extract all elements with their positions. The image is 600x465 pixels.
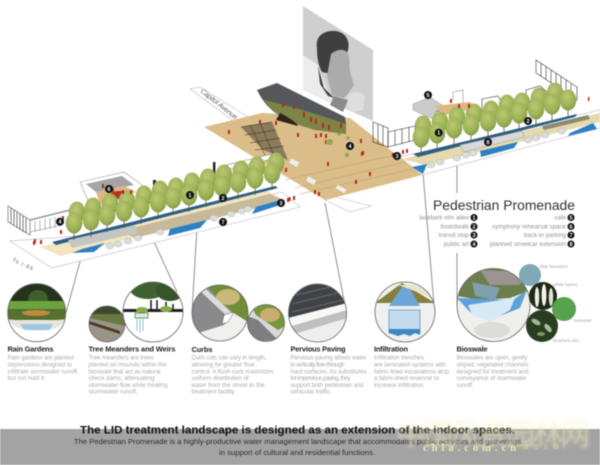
back shelter left (153, 153, 276, 188)
plant: horsetail: horsetail (574, 318, 591, 323)
text: Tree Meanders and Weirs: check dams, attenuating (88, 375, 154, 382)
number badges on plan: 7 (222, 220, 224, 226)
label: Capitol Avenue: Capitol Avenue (199, 88, 239, 121)
text: Infiltration: a fabric-lined reservoir to (374, 375, 440, 382)
text: Curbs (190, 345, 274, 396)
legend: 2 (472, 224, 476, 230)
summary text: The Pedestrian Promenade is a highly-productive water management landscape that accommodates public activities and gatherings (74, 437, 521, 446)
watermark: chla.com.cn (423, 443, 516, 454)
text: Pervious Paving (290, 344, 366, 396)
illustration: tree meander section (123, 279, 184, 342)
text: Pervious Paving: for impervious paving, they (290, 375, 351, 382)
number badges on plan: 1 (437, 131, 440, 137)
text: Rain Gardens: depressions designed to (8, 362, 73, 368)
text: Curbs: treatment facility. (192, 388, 236, 396)
text: Pervious Paving: support both pedestrian and (290, 382, 364, 389)
label: Capitol Avenue (190, 87, 248, 122)
text: Tree Meanders and Weirs: planted on mounds within the (88, 362, 167, 368)
cafe (413, 90, 476, 120)
legend: 4 (472, 242, 476, 248)
legend (419, 214, 574, 248)
streetcar (460, 131, 524, 152)
text: Bioswale: Bioswales are open, gently (456, 354, 528, 362)
text: Curbs: allowing for greater flow (192, 362, 255, 368)
number badges on plan: 1 (188, 193, 192, 199)
text: Tree Meanders and Weirs: stormwater flow while treating (88, 382, 168, 389)
text: Bioswale: runoff. (456, 382, 474, 389)
legend: boardwalk (441, 224, 470, 230)
plant: white lupine: white lupine (553, 282, 578, 287)
number badges on plan: 2 (222, 196, 224, 202)
illustration: bioswale (457, 268, 531, 342)
text: Infiltration: Infiltration trenches (374, 354, 424, 362)
text: Rain Gardens (8, 344, 79, 382)
text: Curbs: Curb cuts can vary in length, (192, 354, 267, 362)
watermark: 中国风景园林网 (396, 419, 590, 452)
text: Pervious Paving: hard surfaces. As substitutes (290, 368, 366, 375)
text: Curbs: Curbs (192, 345, 212, 354)
text: Tree Meanders and Weirs: Tree Meanders and Weirs (88, 344, 176, 354)
text: Infiltration: increase infiltration. (374, 382, 425, 389)
legend: 3 (472, 233, 476, 239)
legend: lacebark elm allee (419, 214, 470, 222)
parked cars right (427, 128, 566, 168)
illustration: tree meander photo (89, 306, 125, 342)
number badges on plan: 3 (396, 154, 398, 160)
text: Tree Meanders and Weirs: Tree meanders are trees (88, 354, 154, 362)
plant: horsetail (552, 297, 591, 323)
number badges on plan (56, 91, 532, 226)
plant: lacebark elm (526, 310, 579, 343)
text: Bioswale: sloped, vegetated channels (456, 362, 528, 368)
text: Infiltration: fabric-lined excavations atop (374, 368, 450, 375)
text: Tree Meanders and Weirs: bioswale that act as natural (88, 368, 160, 375)
rehearsal pavilion (80, 172, 142, 205)
legend: 7 (570, 233, 572, 239)
number badges on plan: 8 (486, 140, 490, 146)
text: Pervious Paving: to vertically flow through (290, 362, 344, 368)
plaza (204, 113, 422, 212)
legend: back-in parking (524, 232, 567, 239)
illustration: rain garden (7, 283, 67, 343)
legend: 8 (570, 242, 572, 248)
text: Infiltration (374, 344, 450, 389)
plant: lacebark elm: lacebark elm (553, 338, 579, 343)
text: Pervious Paving: vehicular traffic. (290, 388, 332, 396)
number badges on plan: 5 (426, 93, 430, 99)
left promenade ground (10, 186, 300, 268)
watermark: 中国风景园林网 (396, 419, 590, 452)
text: Curbs: uniform distribution of (192, 375, 249, 382)
number badges on plan: 6 (108, 187, 110, 193)
legend: public art (444, 241, 469, 248)
text: Bioswale (456, 344, 528, 389)
text: Infiltration: Infiltration (374, 344, 408, 354)
text: Bioswale: Bioswale (456, 344, 488, 354)
text: Rain Gardens: Rain gardens are planted (8, 354, 74, 362)
legend: planned streetcar extension (490, 241, 567, 248)
text: Tree Meanders and Weirs: stormwater runoff. (88, 388, 138, 396)
legend: transit stop (439, 232, 470, 239)
legend: symphony rehearsal space (492, 224, 567, 230)
legend: cafe (554, 214, 567, 222)
illustration: curb large (192, 285, 248, 341)
bottom grey band (0, 429, 600, 465)
number badges on plan: 4 (348, 144, 352, 150)
text: Tree Meanders and Weirs (88, 344, 176, 396)
text: Rain Gardens: Rain Gardens (8, 344, 54, 354)
legend: 1 (472, 215, 476, 221)
billboard portrait (303, 6, 373, 121)
canopy building (257, 83, 346, 134)
text: Pervious Paving: Pervious Paving (290, 344, 346, 354)
illustration: infiltration (375, 282, 435, 342)
number badges on plan: 2 (526, 119, 530, 125)
text: Infiltration: are laminated systems with (374, 362, 446, 368)
headline: The LID treatment landscape is designed as an extension of the indoor spaces. (80, 424, 515, 436)
callout lines (66, 143, 457, 313)
watermark: 景观文摘 (523, 443, 559, 451)
illustration: curb small (247, 304, 285, 342)
summary text (74, 437, 521, 457)
illustration: pervious paving (288, 284, 347, 343)
label: To I-65: To I-65 (11, 257, 34, 272)
heading: Pedestrian Promenade: Pedestrian Promenade (433, 197, 575, 213)
plant: little bluestem (519, 264, 568, 286)
text: Curbs: control. A flush curb maximizes (192, 368, 274, 375)
trees: right promenade (413, 82, 576, 154)
parked cars left (106, 206, 252, 249)
plant: white lupine (529, 282, 578, 310)
number badges on plan: 3 (280, 201, 282, 207)
text: Rain Gardens: infiltrate stormwater runoff, (8, 368, 79, 375)
text: Pervious Paving: Pervious paving allows water (290, 354, 366, 362)
summary text: in support of cultural and residential functions. (219, 448, 375, 457)
text: Bioswale: designed for treatment and (456, 368, 528, 375)
text: Curbs: water from the street to the (190, 382, 265, 389)
red figures (33, 97, 590, 245)
right wireframe buildings (373, 60, 577, 147)
legend: 5 (570, 215, 572, 221)
text: Rain Gardens: but not hold it. (8, 375, 46, 382)
number badges on plan: 4 (58, 220, 62, 226)
trees: left promenade (66, 152, 284, 240)
left end building (8, 206, 70, 235)
text: Bioswale: conveyance of stormwater (456, 375, 526, 382)
right promenade ground (400, 110, 600, 175)
legend: 6 (570, 224, 572, 230)
plant: little bluestem: little bluestem (540, 264, 568, 269)
